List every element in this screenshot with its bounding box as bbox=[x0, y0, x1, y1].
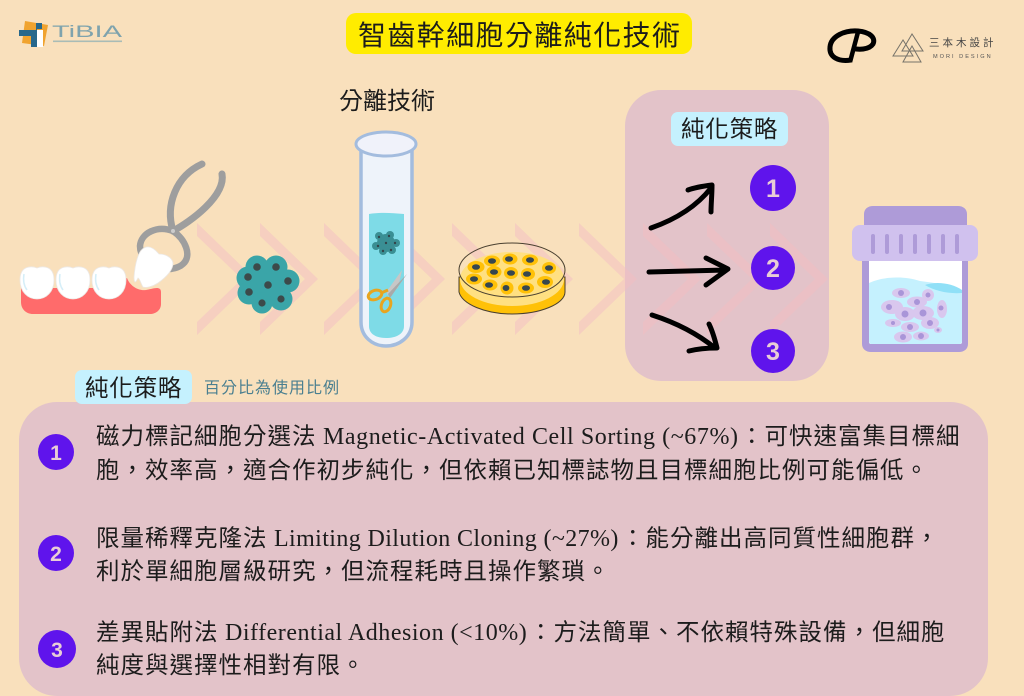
title: 智齒幹細胞分離純化技術 bbox=[358, 20, 681, 51]
strategy 2: 限量稀釋克隆法 bbox=[96, 526, 268, 552]
scissors bbox=[367, 270, 407, 313]
badge 3 bbox=[751, 329, 795, 373]
heading pill: purification strategy: 純化策略 bbox=[85, 375, 182, 401]
strategy 1: 1 bbox=[50, 442, 62, 465]
icon: petri dish bbox=[459, 243, 565, 314]
arrow straight bbox=[649, 258, 728, 285]
strategy 1: 磁力標記細胞分選法 bbox=[96, 424, 316, 450]
strategy 2 bbox=[38, 525, 940, 585]
heading pill: purification strategy bbox=[75, 370, 192, 404]
icon: teeth and gum bbox=[20, 267, 161, 314]
heading pill bbox=[671, 112, 788, 146]
logo: Mori Design bbox=[893, 34, 996, 62]
strategy 2: 利於單細胞層級研究，但流程耗時且操作繁瑣。 bbox=[96, 558, 610, 585]
arrow down bbox=[652, 315, 717, 351]
strategy 3: ：方法簡單、不依賴特殊設備，但細胞 bbox=[529, 619, 946, 646]
strategy 1: 胞，效率高，適合作初步純化，但依賴已知標誌物且目標細胞比例可能偏低。 bbox=[96, 457, 929, 484]
icon: specimen jar with cells bbox=[852, 206, 978, 352]
strategy 1: Magnetic-Activated Cell Sorting (~67%) bbox=[323, 424, 739, 450]
badge 3: 3 bbox=[766, 338, 780, 366]
logo: CP bbox=[830, 31, 874, 62]
strategy 2: 2 bbox=[50, 543, 62, 566]
icon: test tube bbox=[356, 132, 416, 346]
badge 2 bbox=[751, 246, 795, 290]
strategy 3: Differential Adhesion (<10%) bbox=[225, 620, 527, 646]
icon: extracted tooth bbox=[134, 247, 173, 287]
strategy 3: 3 bbox=[51, 639, 63, 662]
heading pill: 純化策略 bbox=[681, 116, 778, 142]
strategy 3: 純度與選擇性相對有限。 bbox=[96, 652, 366, 679]
panel: purification strategy diagram bbox=[625, 90, 829, 381]
cells in tube bbox=[372, 231, 400, 255]
badge 2: 2 bbox=[766, 255, 780, 283]
strategy 2: Limiting Dilution Cloning (~27%) bbox=[274, 526, 619, 552]
panel: strategy details bbox=[19, 402, 988, 696]
badge 1: 1 bbox=[766, 175, 780, 203]
icon: stem cell cluster bbox=[236, 256, 300, 314]
arrow up bbox=[651, 185, 712, 228]
badge 1 bbox=[750, 165, 796, 211]
strategy 3: 差異貼附法 bbox=[96, 620, 218, 646]
strategy 1 bbox=[38, 423, 960, 484]
logo: TiBIA bbox=[19, 21, 123, 47]
strategy 3 bbox=[38, 619, 946, 679]
note: percentages: 百分比為使用比例 bbox=[204, 379, 340, 397]
logo: Mori Design: 三本木設計 bbox=[929, 36, 996, 49]
strategy 1: ：可快速富集目標細 bbox=[740, 423, 960, 450]
label: separation technique: 分離技術 bbox=[339, 88, 435, 115]
logo: TiBIA: TiBIA bbox=[52, 22, 123, 41]
strategy 2: ：能分離出高同質性細胞群， bbox=[621, 525, 940, 552]
chevron flow background bbox=[197, 223, 637, 335]
logo: Mori Design: MORI DESIGN bbox=[933, 54, 993, 60]
icon: dental forceps bbox=[140, 164, 222, 269]
purple cells bbox=[881, 288, 947, 342]
